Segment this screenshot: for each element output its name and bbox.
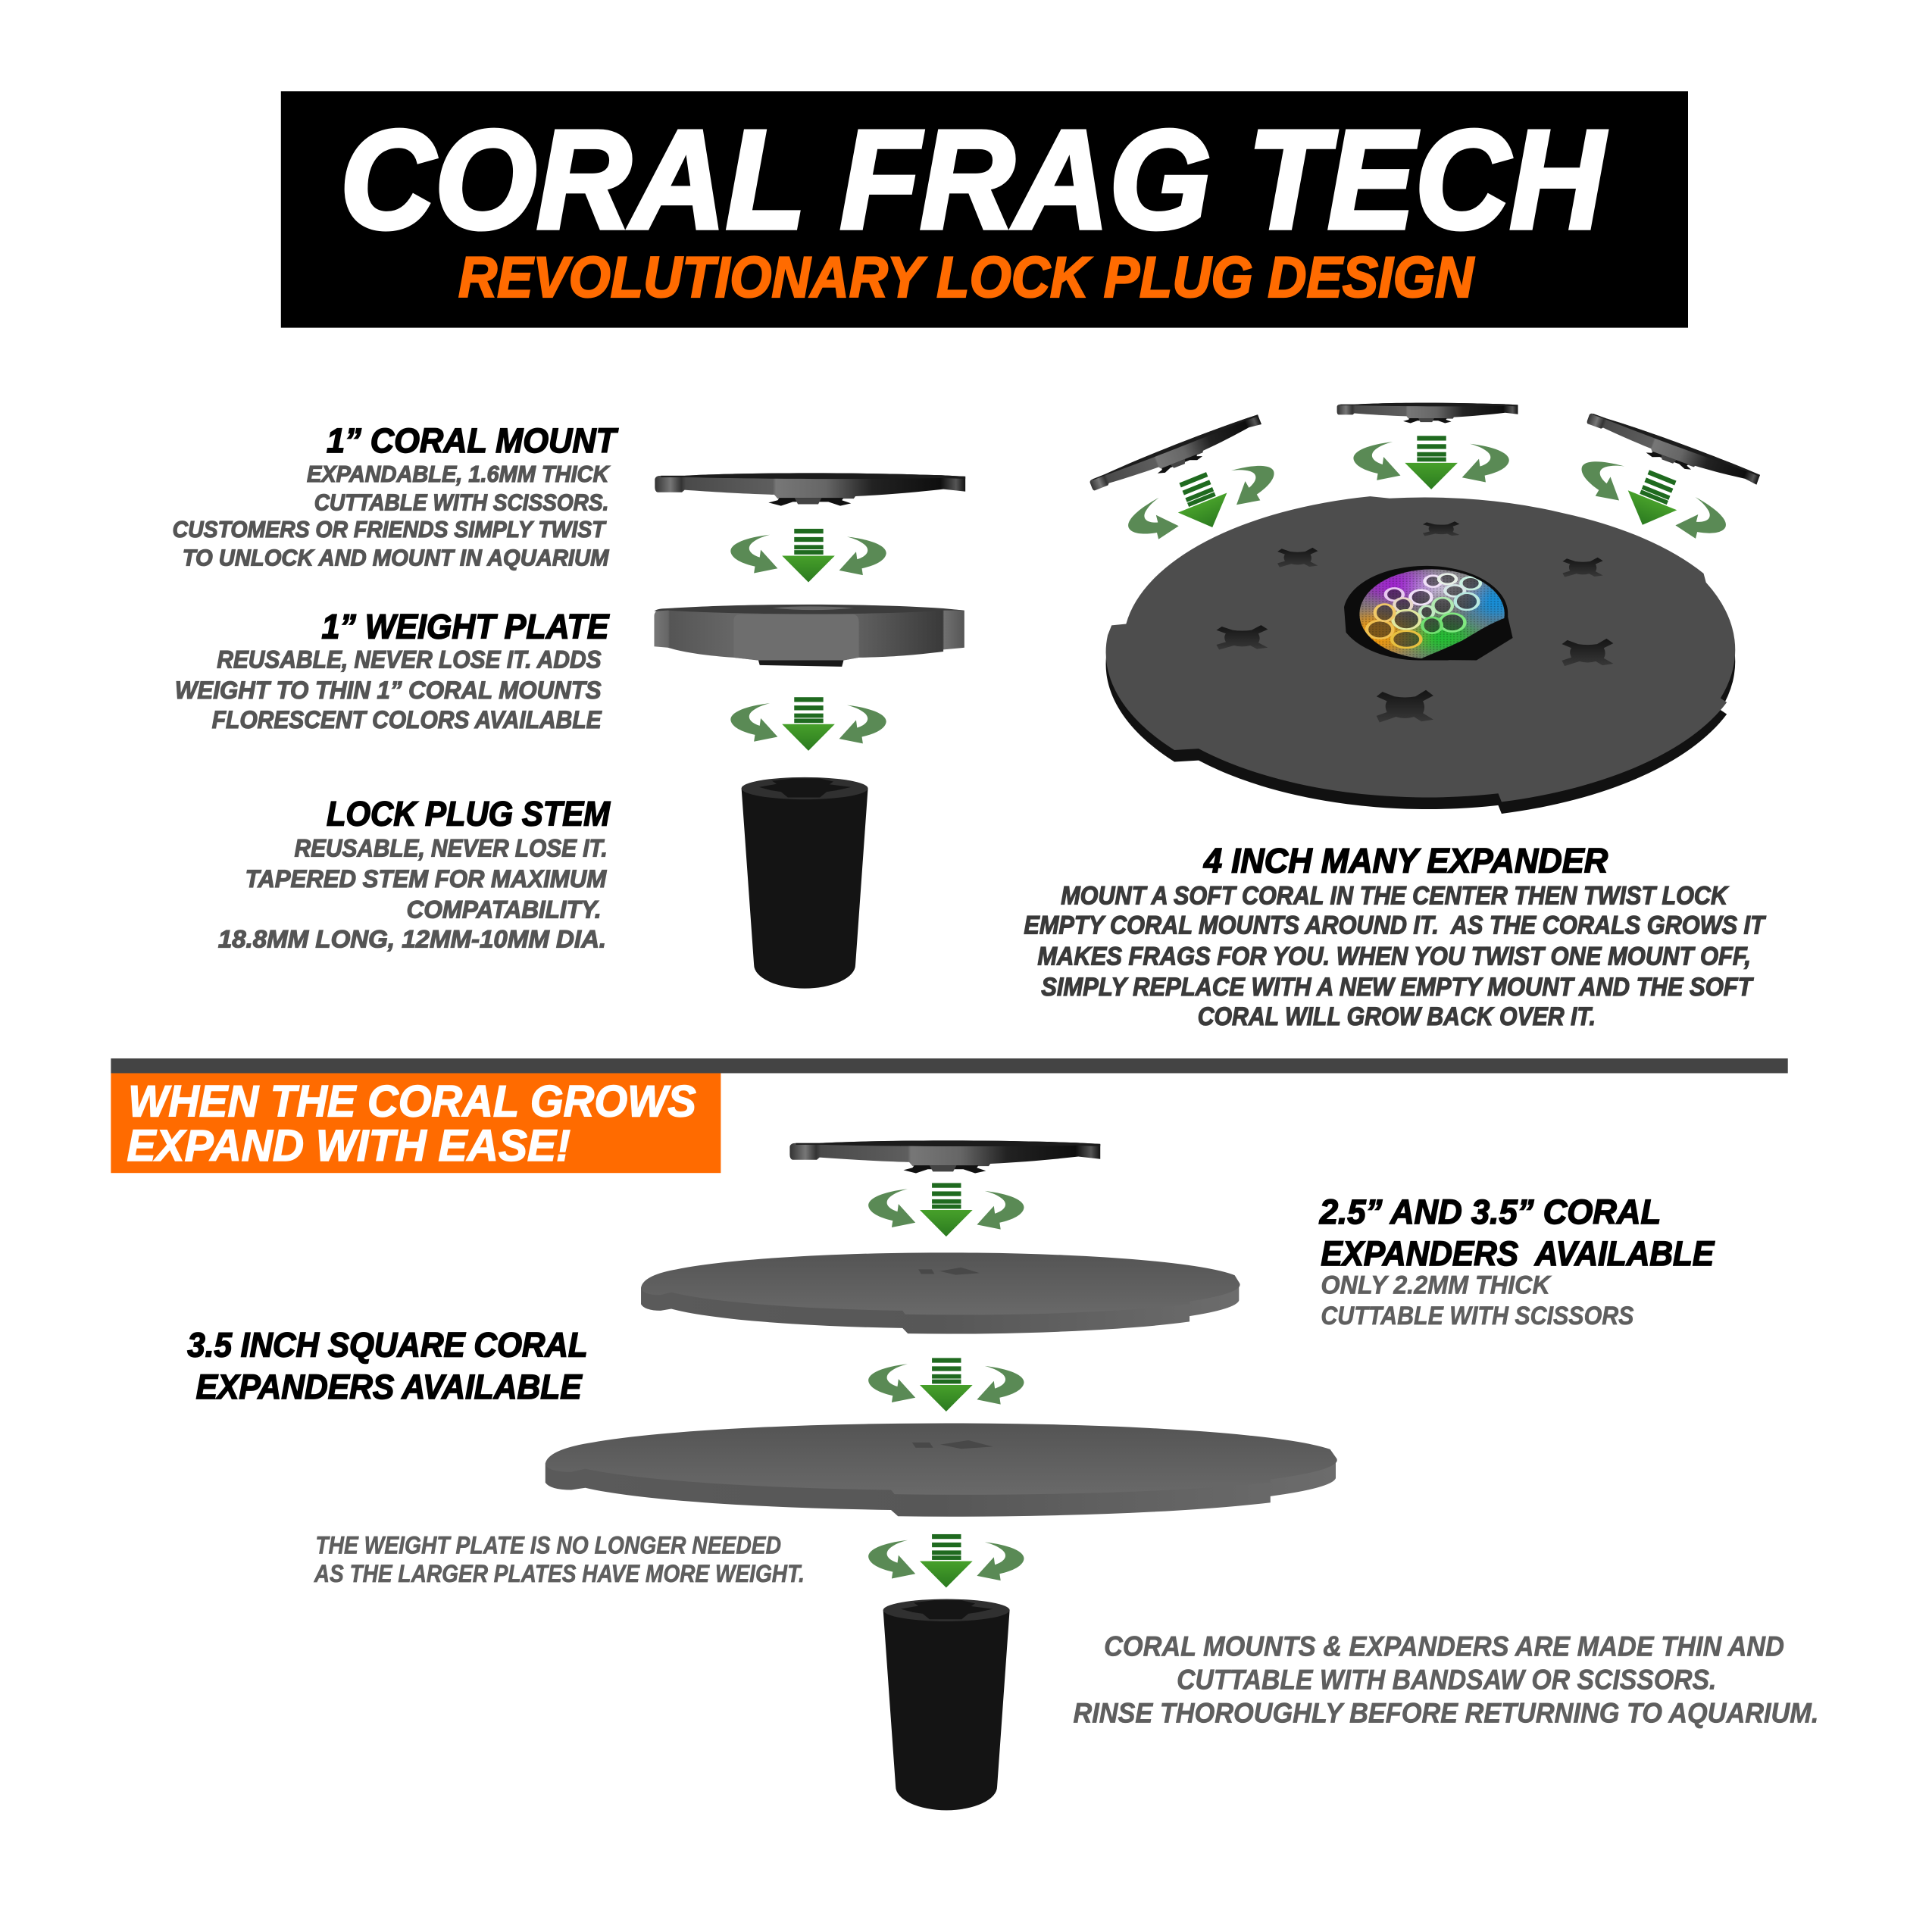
text block: 1 inch coral mount: TO UNLOCK AND MOUNT IN AQUARIUM <box>183 544 610 571</box>
text block: 1 inch weight plate: REUSABLE, NEVER LOSE IT. ADDS <box>217 646 602 673</box>
text block: 3.5 inch square coral expanders <box>187 1326 588 1406</box>
text block: weight plate note: AS THE LARGER PLATES HAVE MORE WEIGHT. <box>314 1560 805 1587</box>
callout: when the coral grows: EXPAND WITH EASE! <box>127 1121 571 1171</box>
expander disc 3.5 inch <box>546 1424 1337 1517</box>
text block: 2.5 and 3.5 coral expanders: 2.5” AND 3.5” CORAL <box>1319 1193 1661 1231</box>
arrow: lower 2 <box>868 1358 1024 1411</box>
title banner <box>281 91 1688 328</box>
arrow: lower 3 <box>868 1534 1024 1588</box>
text block: lock plug stem: LOCK PLUG STEM <box>327 795 611 833</box>
text block: 3.5 inch square coral expanders: 3.5 INCH SQUARE CORAL <box>187 1326 588 1365</box>
text block: cuttable note: CORAL MOUNTS & EXPANDERS ARE MADE THIN AND <box>1104 1630 1784 1662</box>
text block: 4 inch many expander: SIMPLY REPLACE WITH A NEW EMPTY MOUNT AND THE SOFT <box>1041 973 1754 1002</box>
text block: 2.5 and 3.5 coral expanders: EXPANDERS AVAILABLE <box>1321 1234 1715 1273</box>
text block: 4 inch many expander: MOUNT A SOFT CORAL IN THE CENTER THEN TWIST LOCK <box>1061 882 1729 911</box>
sockets <box>1216 521 1613 722</box>
text block: 4 inch many expander: CORAL WILL GROW BACK OVER IT. <box>1198 1002 1596 1031</box>
text block: 4 inch many expander <box>1024 841 1767 1031</box>
callout: when the coral grows <box>111 1073 721 1173</box>
arrow: left <box>1121 449 1284 556</box>
lock plug stem: lower <box>883 1599 1010 1810</box>
text block: lock plug stem: TAPERED STEM FOR MAXIMUM <box>245 865 607 893</box>
text block: 1 inch coral mount: CUSTOMERS OR FRIENDS SIMPLY TWIST <box>173 516 607 542</box>
text block: 1 inch weight plate: 1” WEIGHT PLATE <box>321 607 610 646</box>
text block: 2.5 and 3.5 coral expanders: ONLY 2.2MM THICK <box>1321 1271 1552 1300</box>
text block: 1 inch weight plate <box>175 607 610 733</box>
text block: 1 inch weight plate: FLORESCENT COLORS AVAILABLE <box>212 706 602 733</box>
text block: 4 inch many expander: 4 INCH MANY EXPANDER <box>1203 841 1608 880</box>
text block: weight plate note <box>314 1532 805 1587</box>
text block: 4 inch many expander: EMPTY CORAL MOUNTS AROUND IT. AS THE CORALS GROWS IT <box>1024 911 1767 940</box>
lock plug stem part <box>742 777 868 989</box>
text block: 1 inch coral mount <box>173 421 618 571</box>
text block: lock plug stem: COMPATABILITY. <box>407 896 602 924</box>
coral mount part <box>655 473 965 506</box>
arrow: right <box>1571 446 1735 554</box>
text block: weight plate note: THE WEIGHT PLATE IS NO LONGER NEEDED <box>315 1532 781 1559</box>
expander plate <box>1106 496 1735 814</box>
small mount: top <box>1337 403 1518 423</box>
arrow: top <box>1353 436 1509 489</box>
text block: 4 inch many expander: MAKES FRAGS FOR YOU. WHEN YOU TWIST ONE MOUNT OFF, <box>1037 942 1751 971</box>
text block: 1 inch coral mount: CUTTABLE WITH SCISSORS. <box>314 489 608 515</box>
text block: 1 inch weight plate: WEIGHT TO THIN 1” CORAL MOUNTS <box>175 677 602 704</box>
title: CORAL FRAG TECH <box>340 102 1607 258</box>
text block: cuttable note: RINSE THOROUGHLY BEFORE RETURNING TO AQUARIUM. <box>1073 1697 1818 1729</box>
small mount: left <box>1089 412 1265 499</box>
text block: 1 inch coral mount: EXPANDABLE, 1.6MM THICK <box>307 461 611 487</box>
arrow: twist down 1 <box>730 529 886 583</box>
text block: lock plug stem <box>218 795 611 953</box>
panel: 4 inch many expander <box>1089 403 1761 814</box>
text block: cuttable note <box>1073 1630 1818 1729</box>
text block: 2.5 and 3.5 coral expanders: CUTTABLE WITH SCISSORS <box>1321 1302 1634 1330</box>
text block: lock plug stem: 18.8MM LONG, 12MM-10MM DIA. <box>218 926 606 953</box>
subtitle: REVOLUTIONARY LOCK PLUG DESIGN <box>458 245 1475 310</box>
text block: cuttable note: CUTTABLE WITH BANDSAW OR SCISSORS. <box>1177 1664 1716 1696</box>
small mount: right <box>1583 411 1761 494</box>
callout: when the coral grows: WHEN THE CORAL GROWS <box>128 1077 696 1126</box>
center coral <box>1343 565 1520 663</box>
text block: 1 inch coral mount: 1” CORAL MOUNT <box>327 421 618 460</box>
expander disc 2.5 inch <box>641 1252 1240 1334</box>
text block: 2.5 and 3.5 coral expanders <box>1319 1193 1715 1330</box>
coral mount: lower assembly <box>789 1140 1100 1174</box>
weight plate part <box>654 605 964 667</box>
arrow: twist down 2 <box>730 697 886 751</box>
text block: 3.5 inch square coral expanders: EXPANDERS AVAILABLE <box>196 1368 583 1406</box>
text block: lock plug stem: REUSABLE, NEVER LOSE IT. <box>295 834 608 861</box>
arrow: lower 1 <box>868 1183 1024 1236</box>
